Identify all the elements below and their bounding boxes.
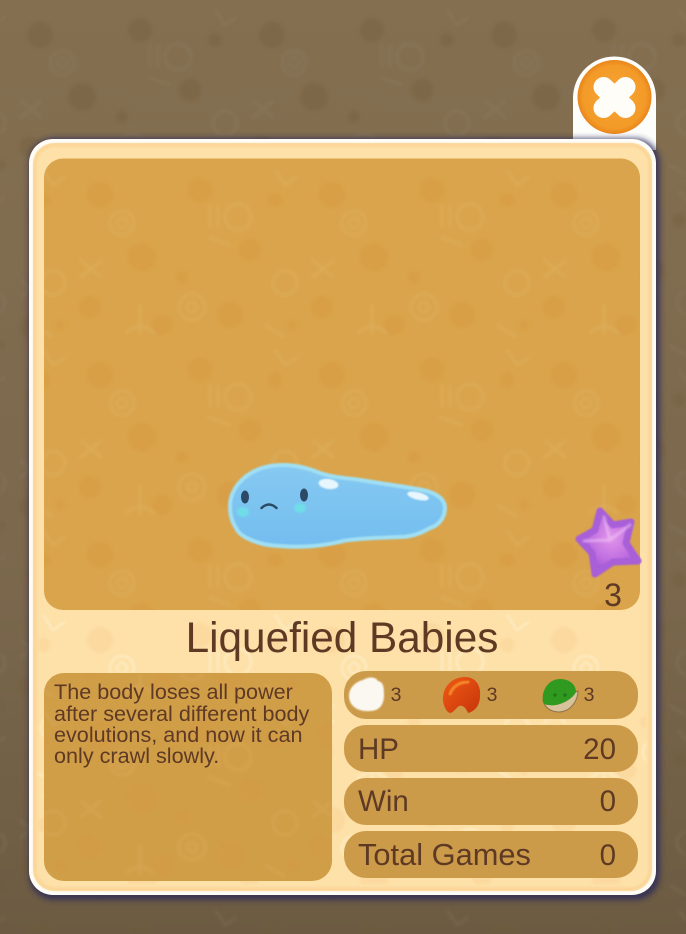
- description text: after several different body: [54, 701, 309, 726]
- icon: purple star: [579, 511, 638, 574]
- panel: creature portrait: [40, 155, 644, 615]
- creature: blue slime: [230, 465, 445, 547]
- icon: green turtle shell: [543, 679, 578, 712]
- title: Liquefied Babies: [186, 614, 498, 661]
- icon: close button: [578, 60, 652, 134]
- stat: Win: 0: [600, 785, 616, 818]
- stat: Total Games: 0: [600, 839, 616, 872]
- stat: Total Games: [344, 831, 638, 878]
- eyes and mouth: [237, 488, 308, 517]
- ingredient count: 3: [487, 684, 497, 706]
- description text: only crawl slowly.: [54, 743, 219, 768]
- ingredient count: 3: [391, 684, 401, 706]
- highlights: [318, 478, 430, 502]
- ingredient count: 3: [584, 684, 594, 706]
- stat: Total Games: Total Games: [358, 837, 531, 872]
- close button tab: [573, 56, 656, 150]
- stat: HP: [344, 725, 638, 772]
- stat: HP: HP: [358, 733, 399, 766]
- card: [29, 138, 660, 900]
- description text: evolutions, and now it can: [54, 722, 302, 747]
- stat: HP: 20: [583, 733, 616, 766]
- panel: ingredients: [344, 671, 638, 719]
- description text: The body loses all power: [54, 679, 293, 704]
- stat: Win: [344, 778, 638, 825]
- icon: red crab shell: [443, 677, 480, 713]
- stat: Win: Win: [358, 785, 409, 818]
- star count: 3: [604, 577, 622, 613]
- icon: white shell: [349, 677, 384, 711]
- panel: description: [44, 673, 332, 881]
